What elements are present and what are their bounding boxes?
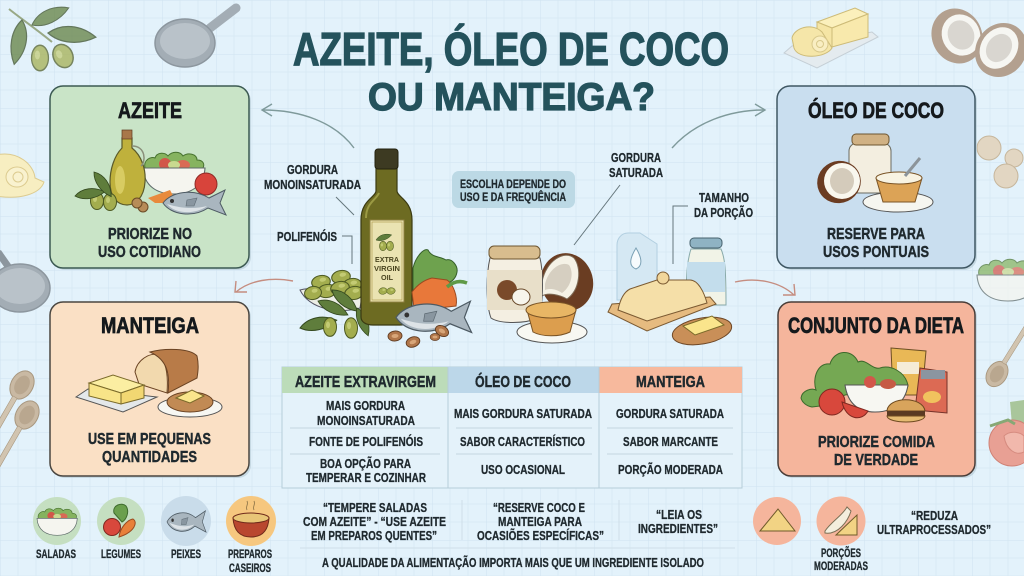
panel: manteiga bbox=[50, 302, 251, 478]
bottom icon: peixes: PEIXES bbox=[171, 549, 201, 561]
text: priorize comida bbox=[818, 434, 935, 469]
label: gordura saturada: SATURADA bbox=[609, 166, 663, 180]
illustration: olive bowl bbox=[299, 269, 373, 338]
illustration: olive oil bottle: VIRGIN bbox=[374, 264, 400, 273]
quote: reserve bbox=[477, 501, 604, 543]
table column: azeite extravirgem: MAIS GORDURA bbox=[326, 399, 405, 413]
illustration: olive oil bottle: OIL bbox=[381, 273, 393, 282]
quote: reserve: MANTEIGA PARA bbox=[498, 515, 582, 529]
table column: manteiga: SABOR MARCANTE bbox=[623, 435, 718, 449]
illustration: azeite, salad, fish bbox=[74, 130, 226, 215]
bottom icon: porcoes moderadas: PORÇÕES bbox=[821, 547, 861, 560]
footer statement: A QUALIDADE DA ALIMENTAÇÃO IMPORTA MAIS QUE UM INGREDIENTE ISOLADO bbox=[322, 555, 704, 570]
table column: manteiga: MANTEIGA bbox=[636, 374, 705, 391]
text: priorize comida: DE VERDADE bbox=[834, 452, 918, 469]
text: reserve: USOS PONTUAIS bbox=[823, 244, 929, 261]
quote: azeite: COM AZEITE” - “USE AZEITE bbox=[303, 515, 446, 529]
illustration: salad, tomato, burger, snacks bbox=[801, 348, 947, 422]
bottom icon: preparos caseiros: CASEIROS bbox=[229, 563, 271, 575]
bottom icon: preparos caseiros bbox=[226, 496, 276, 575]
decoration: salad right bbox=[977, 259, 1024, 301]
label: gordura monoinsaturada bbox=[264, 163, 361, 215]
bottom icon: saladas: SALADAS bbox=[36, 549, 76, 561]
quote: leia bbox=[638, 508, 718, 536]
table column: manteiga bbox=[616, 374, 724, 477]
decoration: spoons left bbox=[0, 367, 44, 476]
table column: oleo de coco: SABOR CARACTERÍSTICO bbox=[460, 434, 585, 449]
decoration: hazelnuts bbox=[977, 136, 1023, 188]
decoration: butter top right bbox=[784, 8, 878, 68]
label: polifenois: POLIFENÓIS bbox=[277, 229, 337, 244]
bottom icon: porcoes moderadas: MODERADAS bbox=[814, 561, 868, 573]
illustration: coconut oil jar, coconut, tart bbox=[487, 246, 600, 343]
table column: azeite extravirgem: FONTE DE POLIFENÓIS bbox=[309, 434, 423, 449]
heading: azeite: AZEITE bbox=[118, 98, 182, 123]
quote: azeite: “TEMPERE SALADAS bbox=[323, 501, 427, 515]
illustration: vegetables, fish, nuts bbox=[388, 250, 472, 349]
decoration: pan top bbox=[155, 8, 236, 67]
decoration: spoon right bbox=[981, 320, 1024, 391]
arrow: to manteiga bbox=[235, 279, 293, 292]
bottom icon: sugar pile bbox=[753, 497, 801, 545]
decoration: coconut top right bbox=[923, 0, 1024, 87]
text: priorize: USO COTIDIANO bbox=[98, 244, 201, 261]
label: polifenois bbox=[277, 229, 352, 264]
illustration: butter dish, milk, jar, toast bbox=[608, 233, 734, 349]
text: priorize comida: PRIORIZE COMIDA bbox=[818, 434, 935, 451]
bottom icon: preparos caseiros: PREPAROS bbox=[228, 549, 272, 561]
quote: azeite: EM PREPAROS QUENTES” bbox=[311, 529, 437, 543]
quote: azeite bbox=[303, 501, 446, 543]
heading: conjunto da dieta: CONJUNTO DA DIETA bbox=[788, 313, 964, 338]
label: gordura saturada: GORDURA bbox=[611, 151, 661, 165]
callout: escolha bbox=[452, 171, 575, 208]
quote: leia: “LEIA OS bbox=[656, 508, 702, 522]
illustration: butter and bread bbox=[76, 349, 222, 417]
title bbox=[293, 23, 729, 119]
arrow: to oleo de coco bbox=[672, 104, 765, 148]
panel: oleo de coco bbox=[777, 86, 977, 270]
text: use em pequenas bbox=[88, 431, 211, 466]
illustration: olive oil bottle bbox=[361, 149, 412, 325]
title: AZEITE, ÓLEO DE COCO bbox=[293, 23, 729, 75]
text: priorize bbox=[98, 226, 201, 261]
table column: azeite extravirgem: AZEITE EXTRAVIRGEM bbox=[295, 374, 436, 391]
heading: oleo de coco: ÓLEO DE COCO bbox=[808, 98, 944, 123]
text: use em pequenas: QUANTIDADES bbox=[102, 449, 197, 466]
label: tamanho da porcao: TAMANHO bbox=[699, 191, 749, 205]
comparison table bbox=[282, 367, 742, 488]
panel: azeite bbox=[50, 86, 251, 270]
illustration: coconut jar bbox=[810, 134, 933, 212]
text: use em pequenas: USE EM PEQUENAS bbox=[88, 431, 211, 448]
decoration: tomato right bbox=[989, 400, 1024, 466]
table column: azeite extravirgem: BOA OPÇÃO PARA bbox=[320, 456, 411, 471]
decoration: pan left bbox=[0, 252, 50, 312]
table column: oleo de coco: ÓLEO DE COCO bbox=[475, 372, 571, 391]
label: gordura monoinsaturada: MONOINSATURADA bbox=[264, 178, 361, 192]
text: reserve bbox=[823, 226, 929, 261]
text: priorize: PRIORIZE NO bbox=[108, 226, 192, 243]
decoration: butter curl bbox=[0, 154, 44, 197]
label: gordura monoinsaturada: GORDURA bbox=[287, 163, 338, 177]
text: reserve: RESERVE PARA bbox=[827, 226, 925, 243]
callout: escolha: USO E DA FREQUÊNCIA bbox=[460, 189, 566, 204]
quote: reduza: “REDUZA bbox=[911, 509, 958, 523]
arrow: to azeite bbox=[262, 104, 354, 148]
table column: azeite extravirgem bbox=[295, 374, 436, 485]
table column: oleo de coco: USO OCASIONAL bbox=[481, 463, 565, 477]
table column: azeite extravirgem: TEMPERAR E COZINHAR bbox=[306, 471, 426, 485]
quote: leia: INGREDIENTES” bbox=[638, 522, 718, 536]
label: gordura saturada bbox=[574, 151, 663, 245]
decoration: olive branch bbox=[8, 1, 97, 71]
title: OU MANTEIGA? bbox=[368, 76, 655, 119]
bottom icon: saladas bbox=[33, 497, 81, 561]
panel: conjunto da dieta bbox=[778, 302, 977, 478]
label: tamanho da porcao bbox=[673, 191, 753, 264]
heading: manteiga: MANTEIGA bbox=[101, 313, 199, 338]
illustration: olive oil bottle: EXTRA bbox=[375, 255, 400, 264]
bottom icon: legumes: LEGUMES bbox=[101, 549, 141, 561]
table column: oleo de coco bbox=[454, 372, 592, 477]
bottom icon: peixes bbox=[161, 496, 211, 561]
quote: reserve: OCASIÕES ESPECÍFICAS” bbox=[477, 528, 604, 543]
table column: manteiga: GORDURA SATURADA bbox=[616, 407, 724, 421]
table column: oleo de coco: MAIS GORDURA SATURADA bbox=[454, 407, 592, 421]
quote: reserve: “RESERVE COCO E bbox=[493, 501, 585, 515]
table column: manteiga: PORÇÃO MODERADA bbox=[618, 462, 723, 477]
bottom icon: legumes bbox=[97, 497, 145, 561]
quote: reduza: ULTRAPROCESSADOS” bbox=[877, 523, 991, 537]
bottom icon: porcoes moderadas bbox=[814, 496, 868, 573]
quote: reduza bbox=[877, 509, 991, 537]
label: tamanho da porcao: DA PORÇÃO bbox=[694, 205, 753, 220]
table column: azeite extravirgem: MONOINSATURADA bbox=[317, 414, 415, 428]
arrow: to conjunto da dieta bbox=[735, 280, 795, 295]
callout: escolha: ESCOLHA DEPENDE DO bbox=[460, 177, 566, 191]
